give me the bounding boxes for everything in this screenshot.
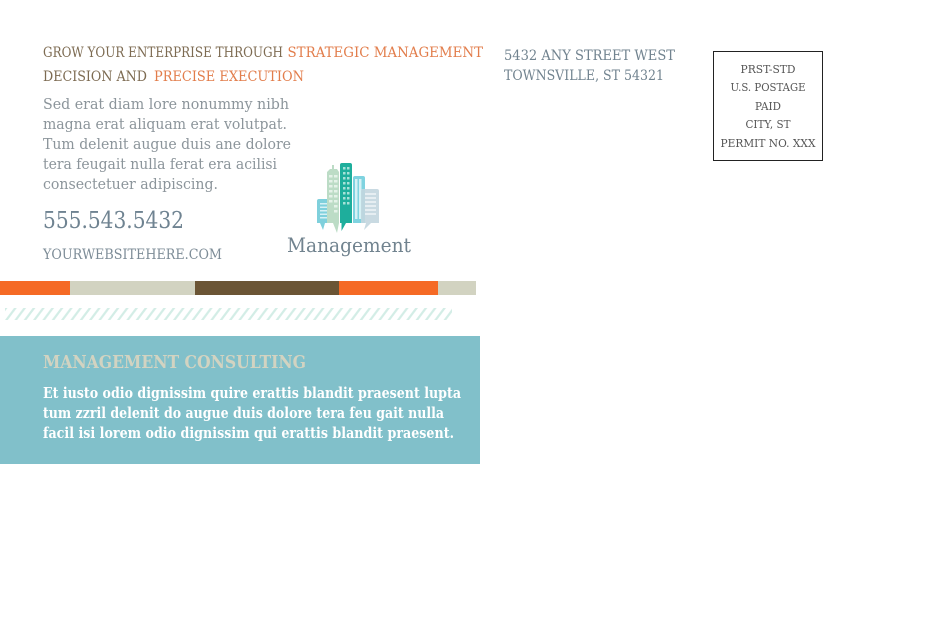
postage permit box: PAID xyxy=(755,100,781,113)
panel body text: facil isi lorem odio dignissim qui erattis blandit praesent. xyxy=(43,425,454,442)
colour bar xyxy=(0,281,476,295)
body text xyxy=(43,95,291,193)
postage permit box: PRST-STD xyxy=(740,63,796,76)
body text: Tum delenit augue duis ane dolore xyxy=(43,135,291,153)
panel body text: tum zzril delenit do augue duis dolore tera feu gait nulla xyxy=(43,405,445,422)
panel: management consulting xyxy=(0,336,480,464)
body text: magna erat aliquam erat volutpat. xyxy=(43,115,287,133)
body text: Sed erat diam lore nonummy nibh xyxy=(43,95,289,113)
headline xyxy=(43,45,484,85)
website: YOURWEBSITEHERE.COM xyxy=(42,247,222,263)
headline: GROW YOUR ENTERPRISE THROUGH xyxy=(43,45,283,61)
phone number: 555.543.5432 xyxy=(43,208,184,234)
return address: 5432 ANY STREET WEST xyxy=(504,48,676,64)
logo: buildings xyxy=(317,163,379,233)
postage permit box: PERMIT NO. XXX xyxy=(720,137,816,150)
panel body text: Et iusto odio dignissim quire erattis blandit praesent lupta xyxy=(43,385,462,402)
headline: STRATEGIC MANAGEMENT xyxy=(288,45,484,61)
return address xyxy=(504,48,676,84)
postage permit box: U.S. POSTAGE xyxy=(730,81,806,94)
return address: TOWNSVILLE, ST 54321 xyxy=(504,68,664,84)
headline: DECISION AND xyxy=(43,69,147,85)
postage permit box: CITY, ST xyxy=(746,118,791,131)
postage permit box xyxy=(714,52,822,160)
panel heading: MANAGEMENT CONSULTING xyxy=(43,352,306,373)
hatched stripe band xyxy=(5,308,452,320)
panel body text xyxy=(43,385,462,442)
headline: PRECISE EXECUTION xyxy=(154,69,304,85)
body text: tera feugait nulla ferat era acilisi xyxy=(43,155,277,173)
logo wordmark: Management xyxy=(287,233,411,257)
body text: consectetuer adipiscing. xyxy=(43,175,218,193)
